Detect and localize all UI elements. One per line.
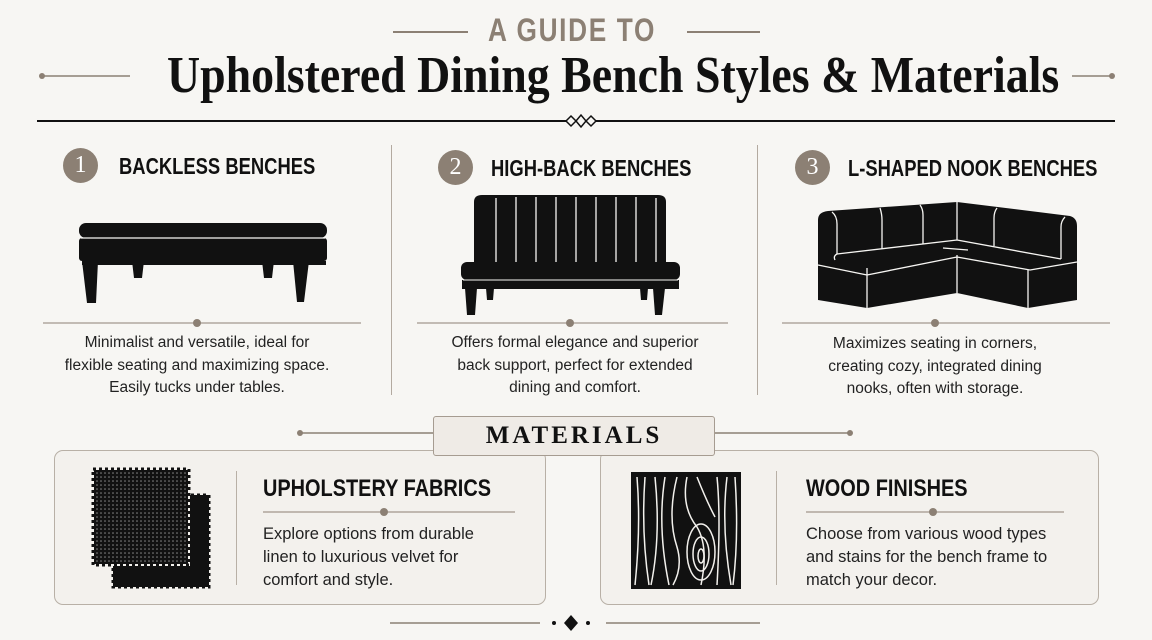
column dividers	[391, 145, 392, 395]
text: Explore options from durable linen to luxurious velvet for comfort and style.	[263, 525, 474, 589]
description: Minimalist and versatile, ideal for flexible seating and maximizing space. Easily tucks under tables.	[65, 334, 329, 396]
text: Choose from various wood types and stains for the bench frame to match your decor.	[806, 525, 1047, 589]
divider	[782, 319, 1110, 327]
number badge 2: 2	[450, 154, 462, 180]
number badge 2	[438, 150, 473, 185]
divider	[236, 471, 237, 585]
divider	[43, 319, 361, 327]
subtitle: a guide to: A GUIDE TO	[488, 12, 656, 48]
rule with dot	[263, 508, 515, 516]
panel: high-back benches	[417, 150, 728, 396]
materials banner: MATERIALS	[486, 422, 662, 449]
header rule with ornament	[37, 114, 1115, 128]
rule with dot	[806, 508, 1064, 516]
icon: backless bench	[79, 223, 327, 303]
description: Maximizes seating in corners, creating cozy, integrated dining nooks, often with storage.	[828, 335, 1042, 397]
icon: fabric swatch	[92, 468, 210, 588]
panel: l-shaped nook benches	[782, 150, 1110, 397]
number badge 3: 3	[806, 154, 818, 180]
heading: WOOD FINISHES	[806, 475, 968, 502]
heading: L-SHAPED NOOK BENCHES	[848, 155, 1097, 181]
panel: backless benches	[43, 148, 361, 396]
icon: wood grain	[631, 472, 741, 589]
divider	[776, 471, 777, 585]
panel: upholstery fabrics	[54, 450, 546, 605]
bottom ornament	[390, 615, 760, 631]
heading: UPHOLSTERY FABRICS	[263, 475, 491, 502]
heading: BACKLESS BENCHES	[119, 153, 315, 179]
number badge 1: 1	[74, 152, 86, 178]
number badge 3	[795, 150, 830, 185]
panel: wood finishes	[600, 450, 1099, 605]
icon: l-shaped bench	[818, 202, 1077, 308]
number badge 1	[63, 148, 98, 183]
divider	[417, 319, 728, 327]
title: Upholstered Dining Bench Styles & Materials	[167, 47, 1059, 104]
description: Offers formal elegance and superior back support, perfect for extended dining and comfort.	[452, 334, 698, 396]
materials banner	[297, 416, 853, 456]
heading: HIGH-BACK BENCHES	[491, 155, 691, 181]
icon: high-back bench	[461, 195, 680, 315]
